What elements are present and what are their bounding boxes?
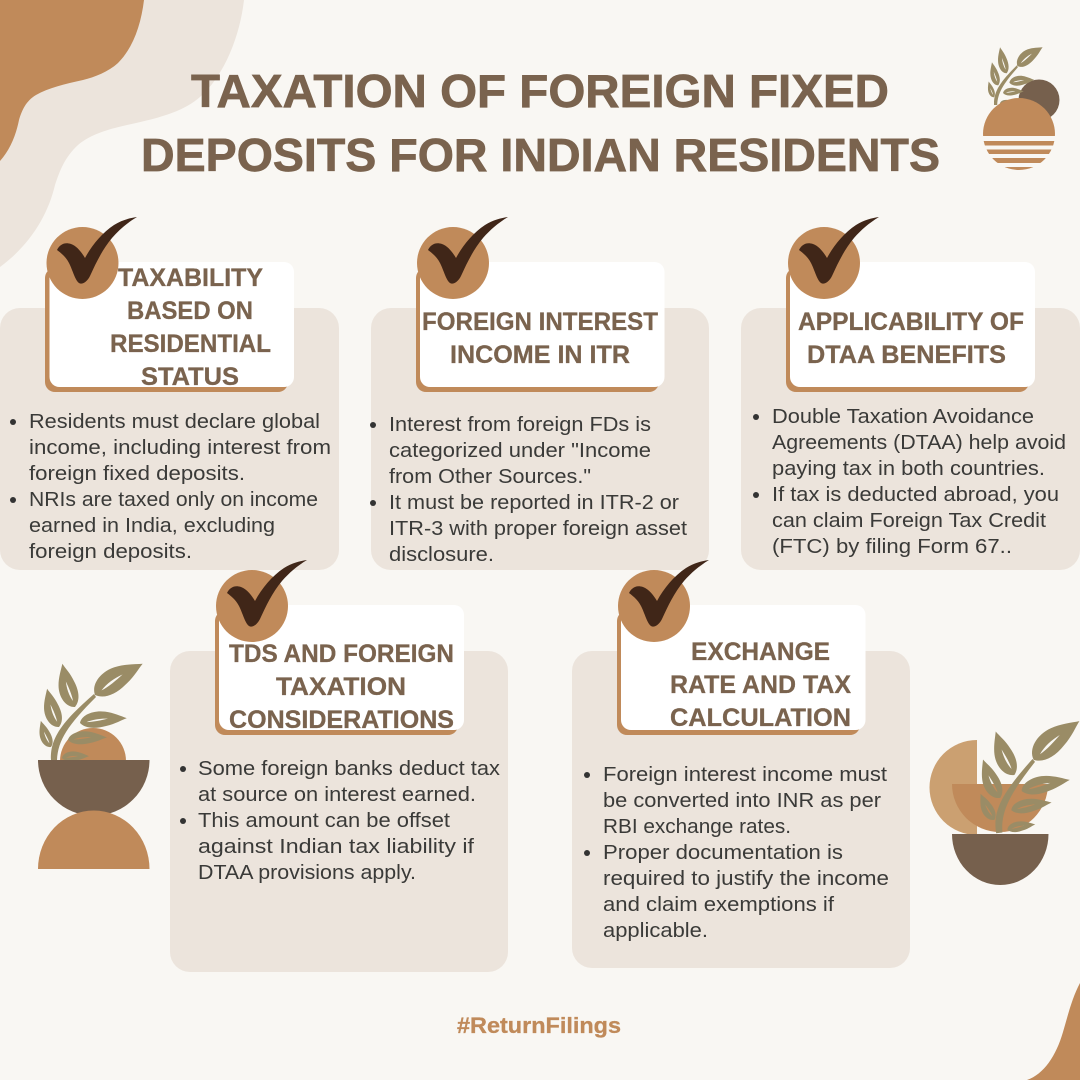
heading card 2 bbox=[416, 217, 664, 392]
body text 5: applicable. bbox=[603, 919, 708, 942]
body text 3: If tax is deducted abroad, you bbox=[772, 483, 1059, 506]
icon: stacked bowl with sprig, left bbox=[35, 653, 149, 869]
body text 3: (FTC) by filing Form 67.. bbox=[772, 535, 1012, 558]
heading card 5: CALCULATION bbox=[670, 704, 851, 732]
body text 1: foreign fixed deposits. bbox=[29, 462, 245, 485]
heading card 4: TDS AND FOREIGN bbox=[229, 640, 454, 668]
body text 3: Agreements (DTAA) help avoid bbox=[772, 431, 1066, 454]
panel 1: taxability based on residential status bbox=[0, 217, 339, 570]
heading card 1 bbox=[45, 217, 294, 392]
body text 4: DTAA provisions apply. bbox=[198, 861, 416, 884]
heading card 1: STATUS bbox=[141, 363, 239, 391]
heading card 5 bbox=[617, 560, 866, 735]
body text 5: Proper documentation is bbox=[603, 841, 843, 864]
body text 4: against Indian tax liability if bbox=[198, 835, 474, 858]
heading card 4 bbox=[215, 560, 464, 735]
background blob: bottom-right tan bbox=[1027, 983, 1080, 1080]
heading card 1: RESIDENTIAL bbox=[110, 330, 271, 358]
background blob: top-left tan bbox=[0, 0, 144, 161]
icon: sun with sprig, top right bbox=[980, 41, 1060, 170]
panel 2: foreign interest income in ITR bbox=[370, 217, 709, 570]
body text 2: Interest from foreign FDs is bbox=[389, 413, 651, 436]
heading card 2: FOREIGN INTEREST bbox=[422, 308, 658, 336]
heading card 3: DTAA BENEFITS bbox=[807, 341, 1006, 369]
panel 5: exchange rate and tax calculation bbox=[572, 560, 910, 968]
body text 1 bbox=[10, 410, 331, 563]
heading card 1: BASED ON bbox=[127, 297, 253, 325]
icon: bowl with half circle and sprig, right bbox=[930, 709, 1080, 885]
title bbox=[141, 65, 940, 181]
hashtag footer: #ReturnFilings bbox=[457, 1013, 621, 1038]
heading card 2: INCOME IN ITR bbox=[450, 341, 630, 369]
body text 4: at source on interest earned. bbox=[198, 783, 476, 806]
heading card 4: CONSIDERATIONS bbox=[229, 706, 454, 734]
body text 4: This amount can be offset bbox=[198, 809, 450, 832]
body text 2: ITR-3 with proper foreign asset bbox=[389, 517, 687, 540]
body text 4 bbox=[180, 757, 501, 884]
body text 5 bbox=[584, 763, 889, 942]
body text 2: from Other Sources." bbox=[389, 465, 591, 488]
body text 3: paying tax in both countries. bbox=[772, 457, 1045, 480]
body text 5: RBI exchange rates. bbox=[603, 815, 791, 838]
body text 1: foreign deposits. bbox=[29, 540, 192, 563]
body text 1: income, including interest from bbox=[29, 436, 331, 459]
body text 2 bbox=[370, 413, 687, 566]
body text 2: disclosure. bbox=[389, 543, 494, 566]
body text 5: Foreign interest income must bbox=[603, 763, 887, 786]
body text 3: Double Taxation Avoidance bbox=[772, 405, 1034, 428]
panel 3: applicability of DTAA benefits bbox=[741, 217, 1080, 570]
body text 5: be converted into INR as per bbox=[603, 789, 881, 812]
body text 2: It must be reported in ITR-2 or bbox=[389, 491, 679, 514]
title: TAXATION OF FOREIGN FIXED bbox=[191, 65, 889, 117]
body text 4: Some foreign banks deduct tax bbox=[198, 757, 501, 780]
heading card 1: TAXABILITY bbox=[118, 264, 263, 292]
heading card 5: RATE AND TAX bbox=[670, 671, 851, 699]
body text 1: earned in India, excluding bbox=[29, 514, 275, 537]
body text 3: can claim Foreign Tax Credit bbox=[772, 509, 1046, 532]
body text 3 bbox=[753, 405, 1066, 558]
heading card 3 bbox=[786, 217, 1035, 392]
body text 1: Residents must declare global bbox=[29, 410, 320, 433]
title: DEPOSITS FOR INDIAN RESIDENTS bbox=[141, 129, 940, 181]
background blob: top-left light bbox=[0, 0, 244, 267]
body text 5: and claim exemptions if bbox=[603, 893, 834, 916]
body text 2: categorized under "Income bbox=[389, 439, 651, 462]
heading card 3: APPLICABILITY OF bbox=[798, 308, 1024, 336]
heading card 5: EXCHANGE bbox=[691, 638, 830, 666]
panel 4: TDS and foreign taxation considerations bbox=[170, 560, 508, 972]
body text 5: required to justify the income bbox=[603, 867, 889, 890]
body text 1: NRIs are taxed only on income bbox=[29, 488, 318, 511]
heading card 4: TAXATION bbox=[276, 673, 406, 701]
